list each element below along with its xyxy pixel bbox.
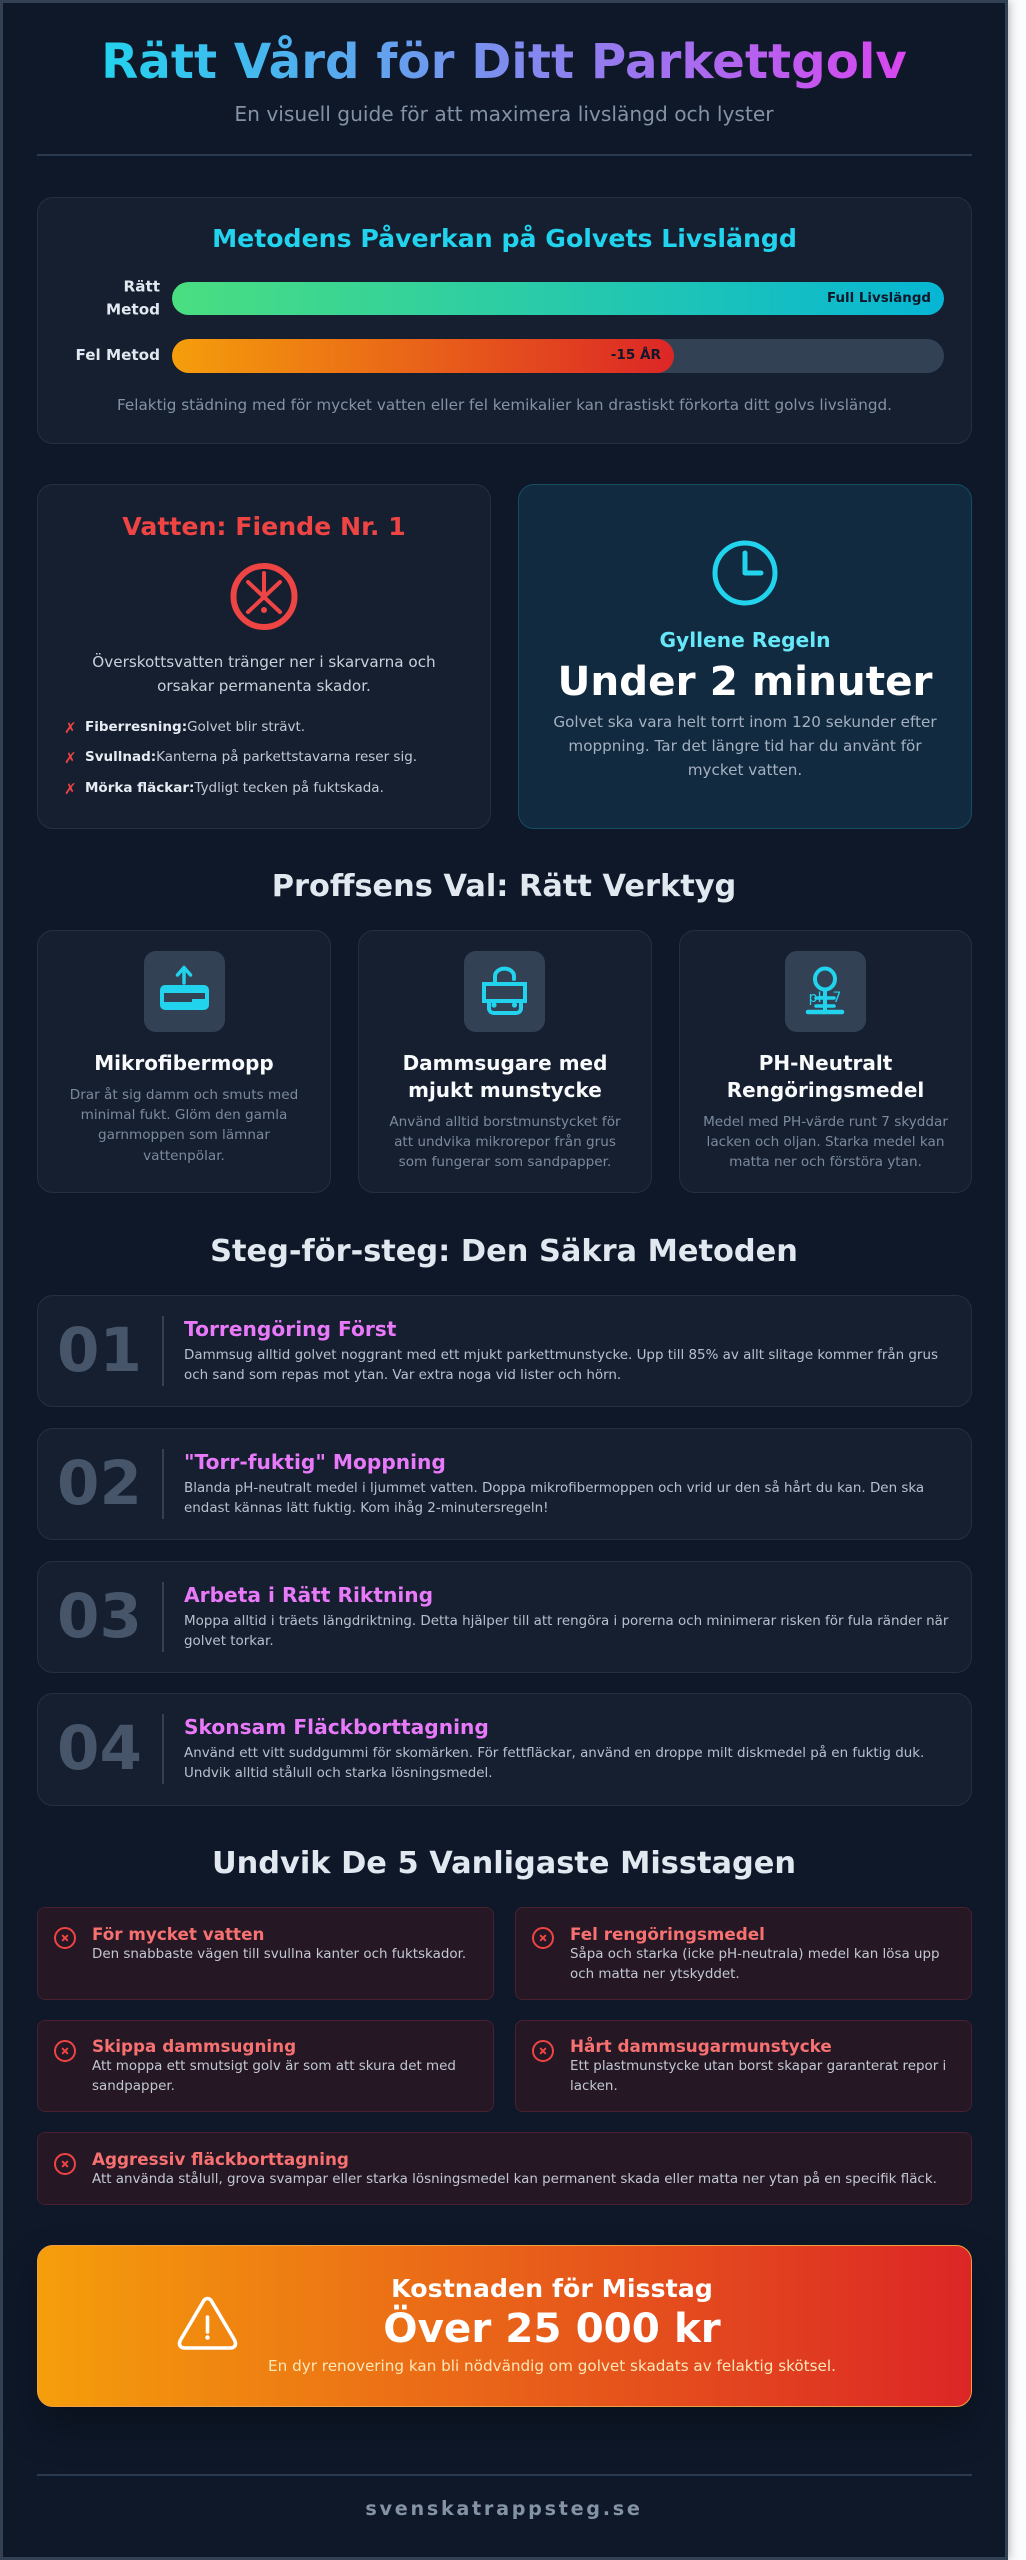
icon: clock	[712, 540, 778, 606]
mistake 2 title: Fel rengöringsmedel	[570, 1924, 765, 1944]
mistake 2 icon	[532, 1927, 554, 1949]
heading: tools: Proffsens Val: Rätt Verktyg	[272, 869, 736, 904]
step 1 text	[184, 1347, 938, 1383]
step 2 text: Blanda pH-neutralt medel i ljummet vatten. Doppa mikrofibermoppen och vrid ur den så hårt du kan. Den ska	[184, 1481, 924, 1496]
mistake 3 text: Att moppa ett smutsigt golv är som att skura det med	[92, 2059, 456, 2074]
tool title	[403, 1051, 607, 1102]
damage item 2	[64, 749, 417, 767]
mistake 5 text: Att använda stålull, grova svampar eller starka lösningsmedel kan permanent skada eller matta ner ytan på en specifik fläck.	[92, 2172, 937, 2187]
mistake 3	[37, 2020, 494, 2112]
text: Mörka fläckar:Tydligt tecken på fuktskada.	[85, 780, 384, 796]
bar label: right method: Metod	[106, 300, 160, 318]
cost title: Kostnaden för Misstag	[391, 2274, 713, 2303]
mistake 5	[37, 2132, 972, 2205]
text: ✗	[64, 719, 77, 737]
tool title	[727, 1051, 924, 1102]
step 3 text	[184, 1614, 948, 1649]
panel: water	[37, 484, 491, 829]
step 4 text: Undvik alltid stålull och starka lösningsmedel.	[184, 1766, 493, 1781]
mistake 4	[515, 2020, 972, 2112]
water text: Överskottsvatten tränger ner i skarvarna och	[92, 653, 436, 671]
tool title: Dammsugare med	[403, 1051, 607, 1075]
icon: ph neutral: pH 7	[809, 990, 841, 1006]
footer: svenskatrappsteg.se	[365, 2497, 643, 2520]
heading: water: Vatten: Fiende Nr. 1	[122, 512, 406, 541]
bar fill: minus 15 years	[172, 339, 674, 373]
step 2 text	[184, 1480, 924, 1516]
tool text: Medel med PH-värde runt 7 skyddar	[703, 1114, 948, 1130]
tool title: Mikrofibermopp	[94, 1051, 274, 1075]
mistake 2 text: och matta ner ytskyddet.	[570, 1967, 740, 1982]
mistake 4 text: lacken.	[570, 2079, 618, 2094]
mistake 2 text	[570, 1946, 940, 1982]
step 4 title: Skonsam Fläckborttagning	[184, 1715, 489, 1739]
golden rule label: Gyllene Regeln	[659, 628, 831, 652]
tool text: som fungerar som sandpapper.	[399, 1154, 611, 1170]
callout: cost	[37, 2245, 972, 2407]
mistake 5 title: Aggressiv fläckborttagning	[92, 2149, 349, 2169]
step 1 text: och sand som repas mot ytan. Var extra noga vid lister och hörn.	[184, 1368, 621, 1383]
mistake 3 icon	[54, 2040, 76, 2062]
step 2 text: endast kännas lätt fuktig. Kom ihåg 2-minutersregeln!	[184, 1501, 549, 1516]
text: Fiberresning:Golvet blir strävt.	[85, 719, 305, 735]
damage item 3	[64, 780, 384, 798]
heading: lifespan chart: Metodens Påverkan på Golvets Livslängd	[212, 224, 797, 253]
icon: vacuum	[464, 951, 545, 1032]
tool title: PH-Neutralt	[759, 1051, 892, 1075]
heading: steps: Steg-för-steg: Den Säkra Metoden	[210, 1234, 798, 1269]
mistake 3 text: sandpapper.	[92, 2079, 175, 2094]
tool text: matta ner och förstöra ytan.	[729, 1154, 922, 1170]
bar: right method	[172, 282, 944, 315]
panel: tool microfiber	[37, 930, 331, 1193]
mistake 2 text: Såpa och starka (icke pH-neutrala) medel kan lösa upp	[570, 1947, 940, 1962]
golden rule text	[553, 713, 937, 779]
bar label: right method	[106, 278, 160, 318]
panel: golden rule	[518, 484, 972, 829]
step 1 title: Torrengöring Först	[184, 1317, 396, 1341]
panel: tool cleaner	[679, 930, 972, 1193]
panel: tool vacuum	[358, 930, 652, 1193]
step 2 title: "Torr-fuktig" Moppning	[184, 1450, 446, 1474]
text: Svullnad:Kanterna på parkettstavarna reser sig.	[85, 749, 417, 765]
mistake 5 icon	[54, 2153, 76, 2175]
mistake 2	[515, 1907, 972, 2000]
cost value: Över 25 000 kr	[383, 2304, 721, 2352]
tool title: mjukt munstycke	[408, 1078, 602, 1102]
tool text: minimal fukt. Glöm den gamla	[81, 1107, 287, 1123]
step 3	[37, 1561, 972, 1673]
step 4 text: Använd ett vitt suddgummi för skomärken. För fettfläckar, använd en droppe milt diskmedel på en fuktig duk.	[184, 1746, 924, 1761]
mistake 1 text: Den snabbaste vägen till svullna kanter och fuktskador.	[92, 1947, 466, 1962]
golden rule text: Golvet ska vara helt torrt inom 120 sekunder efter	[553, 713, 937, 731]
tool text: lacken och oljan. Starka medel kan	[707, 1134, 944, 1150]
water text	[92, 653, 436, 695]
tool text	[70, 1087, 298, 1164]
tool title: Rengöringsmedel	[727, 1078, 924, 1102]
step 3 title: Arbeta i Rätt Riktning	[184, 1583, 433, 1607]
mistake 3 text	[92, 2059, 456, 2094]
bar value: -15 ÅR	[611, 347, 661, 363]
mistake 4 icon	[532, 2040, 554, 2062]
mistake 1 title: För mycket vatten	[92, 1924, 264, 1944]
tool text: Drar åt sig damm och smuts med	[70, 1087, 298, 1103]
icon: ph neutral	[785, 951, 866, 1032]
water text: orsakar permanenta skador.	[157, 677, 371, 695]
step 3 text: golvet torkar.	[184, 1634, 274, 1649]
step 3 number: 03	[57, 1581, 142, 1652]
tool text	[703, 1114, 948, 1170]
tool text: att undvika mikrorepor från grus	[394, 1134, 616, 1150]
icon: water warning	[230, 563, 298, 630]
icon: warning triangle	[178, 2296, 238, 2350]
icon: mop	[144, 951, 225, 1032]
chart note: Felaktig städning med för mycket vatten eller fel kemikalier kan drastiskt förkorta ditt golvs livslängd.	[117, 396, 892, 414]
bar: wrong method	[172, 339, 944, 373]
text: ✗	[64, 749, 77, 767]
step 2	[37, 1428, 972, 1540]
step 3 text: Moppa alltid i träets längdriktning. Detta hjälper till att rengöra i porerna och minimerar risken för fula ränder när	[184, 1614, 948, 1629]
tool text: Använd alltid borstmunstycket för	[389, 1114, 621, 1130]
golden rule text: mycket vatten.	[688, 761, 802, 779]
mistake 4 text	[570, 2059, 946, 2094]
text: ✗	[64, 780, 77, 798]
cost note: En dyr renovering kan bli nödvändig om golvet skadats av felaktig skötsel.	[268, 2357, 836, 2375]
subtitle: En visuell guide för att maximera livslängd och lyster	[234, 102, 774, 126]
tool text	[389, 1114, 621, 1170]
step 4 number: 04	[57, 1713, 142, 1784]
bar label: right method: Rätt	[124, 278, 160, 296]
step 2 number: 02	[57, 1448, 142, 1519]
damage item 1	[64, 719, 305, 737]
step 1 text: Dammsug alltid golvet noggrant med ett mjukt parkettmunstycke. Upp till 85% av allt slitage kommer från grus	[184, 1348, 938, 1363]
golden rule value: Under 2 minuter	[557, 657, 933, 705]
mistake 1 icon	[54, 1927, 76, 1949]
bar value: full lifespan: Full Livslängd	[827, 291, 931, 306]
mistake 3 title: Skippa dammsugning	[92, 2036, 296, 2056]
step 1	[37, 1295, 972, 1407]
panel: lifespan chart	[37, 197, 972, 444]
mistake 4 text: Ett plastmunstycke utan borst skapar garanterat repor i	[570, 2059, 946, 2074]
step 4 text	[184, 1745, 924, 1781]
tool text: vattenpölar.	[143, 1148, 225, 1164]
golden rule text: moppning. Tar det längre tid har du använt för	[568, 737, 922, 755]
heading: mistakes: Undvik De 5 Vanligaste Misstagen	[212, 1846, 796, 1881]
bar label: wrong method: Fel Metod	[75, 346, 160, 364]
step 1 number: 01	[57, 1315, 142, 1386]
mistake 4 title: Hårt dammsugarmunstycke	[570, 2036, 832, 2056]
tool text: garnmoppen som lämnar	[98, 1127, 270, 1143]
mistake 1	[37, 1907, 494, 2000]
step 4	[37, 1693, 972, 1806]
title: Rätt Vård för Ditt Parkettgolv	[101, 34, 907, 90]
